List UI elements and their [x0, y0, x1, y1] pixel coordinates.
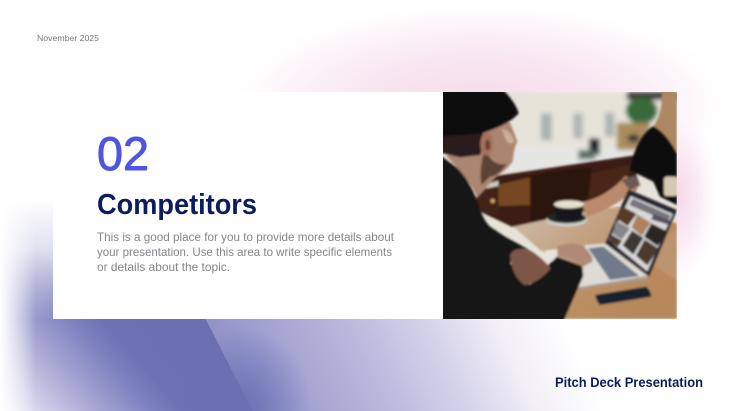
description text: This is a good place for you to provide more details about [97, 230, 395, 244]
man head [447, 122, 517, 197]
panel: white text card [53, 92, 443, 319]
photo: man using laptop in cafe [443, 92, 677, 319]
date label: November 2025 [37, 33, 99, 43]
laptop lid [605, 189, 677, 277]
woman [629, 126, 677, 205]
description text [97, 230, 395, 274]
chair [530, 167, 592, 223]
bench [477, 155, 637, 227]
section number: 02 [97, 127, 149, 180]
footer title: Pitch Deck Presentation [555, 375, 703, 390]
beanie [440, 90, 519, 137]
description text: or details about the topic. [97, 260, 230, 274]
cafe background [443, 92, 677, 319]
laptop base [577, 243, 647, 287]
table [513, 207, 677, 319]
coffee cup [546, 214, 587, 226]
man torso [440, 155, 583, 323]
section heading: Competitors [97, 189, 257, 221]
description text: your presentation. Use this area to write specific elements [97, 245, 392, 259]
hands [510, 249, 551, 285]
furniture, people and laptop [440, 90, 677, 323]
phone [595, 287, 652, 305]
